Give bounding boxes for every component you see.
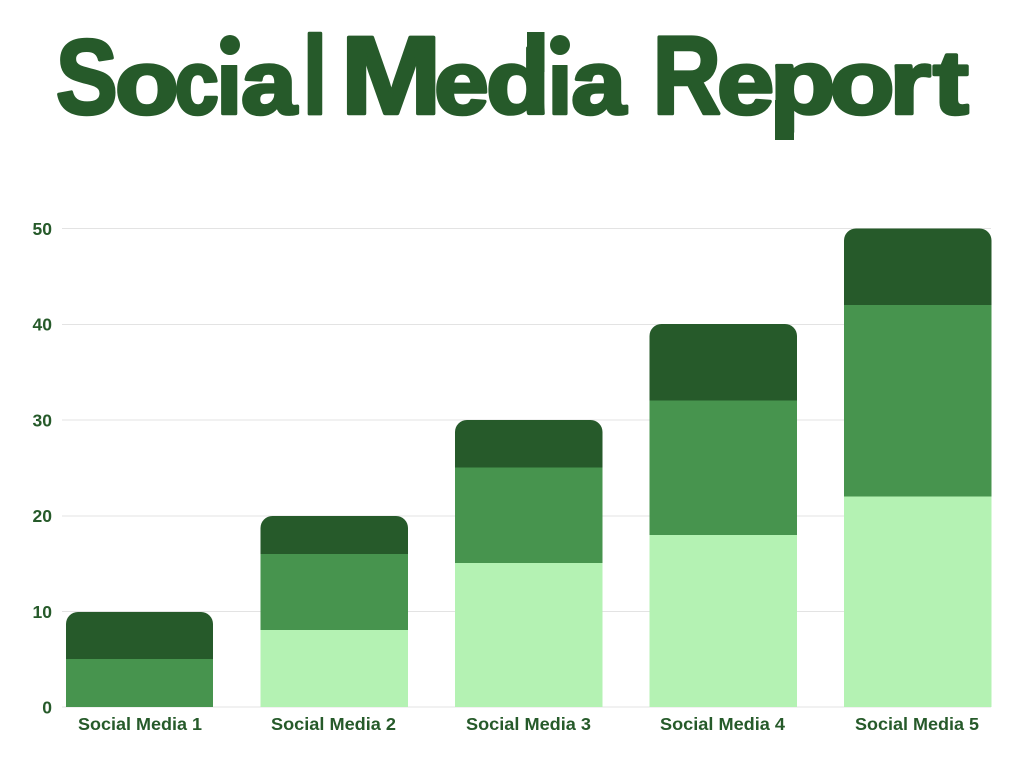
title: S [56, 18, 118, 136]
title: d [486, 34, 550, 134]
title: i [548, 34, 572, 134]
y-axis labels: 40 [33, 314, 52, 334]
x-axis labels [78, 714, 979, 734]
title: r [890, 34, 931, 134]
bar: Social Media 4 [650, 324, 797, 707]
bar: Social Media 2 [260, 516, 408, 707]
title: a [241, 34, 298, 134]
title: t [933, 34, 969, 134]
title: M [341, 14, 442, 138]
title: a [571, 34, 627, 134]
x-axis labels: Social Media 2 [271, 714, 396, 734]
y-axis labels: 50 [33, 219, 52, 239]
x-axis labels: Social Media 5 [855, 714, 979, 734]
title [56, 14, 969, 140]
bar: Social Media 5 [844, 228, 992, 707]
title: o [115, 34, 179, 134]
title: e [434, 34, 489, 134]
y-axis labels: 0 [42, 698, 52, 718]
title: p [770, 34, 835, 134]
y-axis labels: 20 [33, 506, 52, 526]
title: o [830, 34, 894, 134]
y-axis labels [33, 219, 52, 718]
title: i [216, 34, 242, 134]
title: e [717, 34, 774, 134]
y-axis labels: 10 [33, 602, 52, 622]
title: R [653, 14, 721, 138]
title: c [175, 34, 219, 134]
x-axis labels: Social Media 4 [660, 714, 785, 734]
title: l [303, 14, 327, 138]
bar: Social Media 1 [66, 612, 213, 707]
bar: Social Media 3 [455, 420, 602, 707]
y-axis labels: 30 [33, 410, 52, 430]
x-axis labels: Social Media 1 [78, 714, 202, 734]
x-axis labels: Social Media 3 [466, 714, 591, 734]
